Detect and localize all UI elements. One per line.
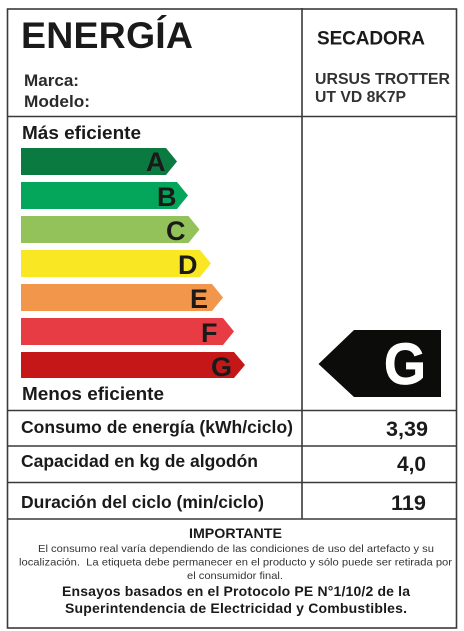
efficiency scale (21, 147, 245, 382)
row: capacity: 4,0 (397, 452, 426, 476)
class indicator arrow G: G (384, 332, 426, 397)
important notice: el consumidor final. (187, 570, 283, 582)
title: ENERGÍA (21, 14, 193, 56)
brand and model labels (24, 72, 90, 111)
bar D: D (178, 250, 198, 280)
heading: most efficient: Más eficiente (22, 123, 141, 143)
important notice: localización. La etiqueta debe permanecer en el producto y sólo puede ser retirada por (19, 556, 453, 568)
bar E (21, 284, 223, 314)
bar D (21, 250, 211, 280)
heading: least efficient: Menos eficiente (22, 384, 164, 404)
row: capacity: Capacidad en kg de algodón (21, 451, 258, 471)
class indicator arrow G (318, 330, 441, 397)
bar A (21, 147, 177, 177)
bar F: F (201, 318, 218, 348)
protocol note (62, 583, 410, 616)
brand and model values: UT VD 8K7P (315, 89, 406, 106)
important notice: IMPORTANTE (189, 525, 282, 541)
row: energy consumption: Consumo de energía (kWh/ciclo) (21, 417, 293, 437)
bar B (21, 182, 188, 212)
bar G (21, 352, 245, 382)
row: energy consumption: 3,39 (386, 417, 428, 441)
brand and model labels: Modelo: (24, 93, 90, 111)
row: cycle duration: Duración del ciclo (min/ciclo) (21, 492, 264, 512)
important notice: El consumo real varía dependiendo de las condiciones de uso del artefacto y su (38, 543, 434, 555)
protocol note: Ensayos basados en el Protocolo PE N°1/10/2 de la (62, 583, 410, 599)
row: cycle duration: 119 (391, 491, 426, 515)
bar F (21, 318, 234, 348)
bar G: G (211, 352, 232, 382)
brand and model values: URSUS TROTTER (315, 71, 450, 88)
bar C (21, 216, 200, 246)
important notice (19, 525, 453, 582)
protocol note: Superintendencia de Electricidad y Combustibles. (65, 600, 407, 616)
bar B: B (157, 182, 176, 212)
row: energy consumption (21, 417, 428, 441)
bar C: C (166, 216, 186, 246)
row: capacity (21, 451, 426, 476)
bar E: E (190, 284, 208, 314)
row: cycle duration (21, 491, 426, 515)
brand and model labels: Marca: (24, 72, 79, 90)
appliance type: SECADORA (317, 28, 425, 50)
brand and model values (315, 71, 450, 106)
bar A: A (146, 147, 166, 177)
